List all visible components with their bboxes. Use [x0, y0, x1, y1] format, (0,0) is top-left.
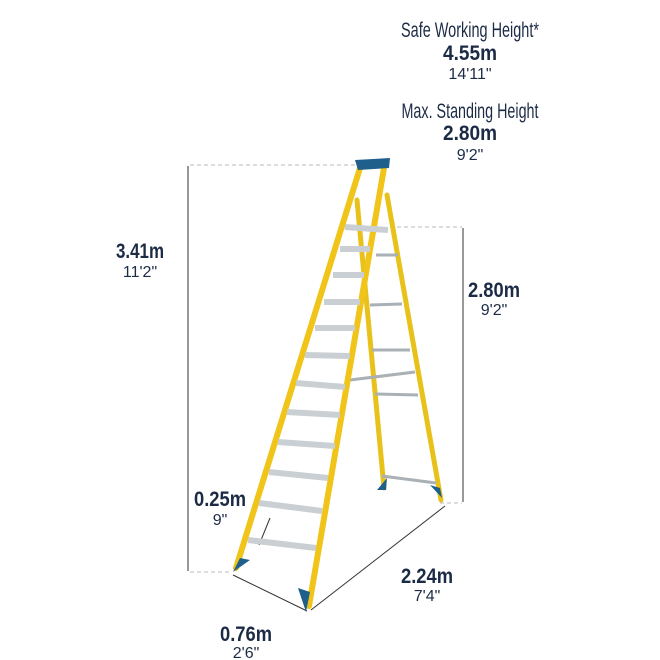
- text: 0.25m: 9": [213, 512, 227, 529]
- treads: [248, 227, 388, 548]
- text: 2.80m: 9'2": [481, 302, 507, 319]
- rear legs: [357, 195, 441, 500]
- heading: max standing height: 2.80m: [443, 122, 497, 145]
- rear braces: [350, 255, 436, 483]
- dimension lines: [188, 165, 463, 611]
- heading: max standing height: 9'2": [457, 147, 483, 164]
- heading: max standing height: Max. Standing Height: [402, 100, 539, 123]
- text: 2.24m: 2.24m: [401, 565, 453, 588]
- text: 0.76m: [220, 623, 272, 660]
- text: 3.41m: 3.41m: [116, 240, 164, 263]
- heading: max standing height: [402, 100, 539, 164]
- text: 0.25m: [194, 488, 246, 529]
- text: 2.24m: 7'4": [414, 588, 440, 605]
- text: 3.41m: [116, 240, 164, 281]
- ladder: [233, 158, 442, 612]
- front rails: [236, 168, 384, 606]
- text: 0.76m: 0.76m: [220, 623, 272, 646]
- text: 2.80m: 2.80m: [468, 279, 520, 302]
- heading: safe working height: 14'11": [448, 66, 492, 83]
- heading: safe working height: Safe Working Height*: [401, 19, 539, 42]
- text: 2.80m: [468, 279, 520, 319]
- top cap: [355, 158, 390, 170]
- text: 2.24m: [401, 565, 453, 605]
- text: 0.25m: 0.25m: [194, 488, 246, 511]
- heading: safe working height: 4.55m: [443, 42, 497, 65]
- heading: safe working height: [401, 19, 539, 83]
- text: 3.41m: 11'2": [123, 264, 157, 281]
- feet: [233, 478, 442, 612]
